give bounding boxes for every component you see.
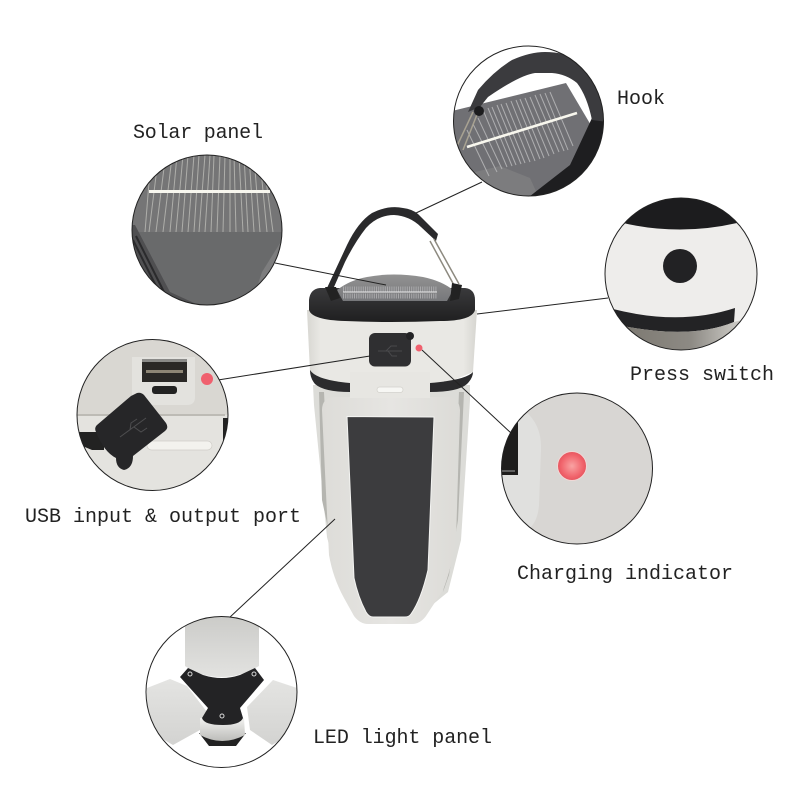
rear light panels: [313, 385, 470, 615]
fold tab pill: [147, 441, 212, 450]
lower dark band left: [310, 370, 350, 392]
lantern product: [307, 207, 477, 624]
fold tab pill: [377, 387, 403, 392]
label: Solar panel: Solar panel: [133, 122, 263, 145]
hook clip wires: [457, 112, 478, 150]
dark top cap: [309, 288, 475, 322]
right panel arm: [247, 680, 297, 745]
hook bus bar: [467, 113, 577, 147]
plate screws: [188, 672, 256, 718]
hook arm: [468, 52, 607, 122]
clip anchor: [450, 283, 462, 301]
USB cover symbol: [120, 418, 147, 437]
label: USB input & output port: USB input & output port: [25, 506, 301, 529]
base cylinder: [200, 718, 245, 741]
lantern white body: [307, 310, 477, 384]
charging LED: [416, 344, 422, 352]
callout: LED light panel: [144, 610, 300, 771]
switch top dark band: [625, 198, 737, 230]
solar grid lines: [145, 155, 273, 232]
hook solar surface: [454, 83, 590, 192]
front light panel: [322, 397, 460, 624]
handle lower end: [325, 287, 340, 301]
lower dark band right: [430, 372, 473, 392]
solar panel cells: [343, 289, 437, 296]
fold tab: [350, 372, 430, 398]
top panel column: [185, 617, 259, 677]
three-arm dark plate: [180, 668, 264, 725]
solar bus bar: [149, 190, 270, 193]
solar panel top: [337, 274, 453, 301]
hook solar grid lines: [467, 92, 573, 176]
callout: solar panel: [130, 150, 285, 312]
dark sliver: [223, 418, 228, 440]
USB cover: [369, 332, 414, 366]
base foot: [199, 733, 246, 746]
micro USB socket: [152, 386, 177, 394]
callout: press switch: [604, 198, 758, 350]
label: Press switch: Press switch: [630, 364, 774, 387]
dark band: [80, 432, 104, 450]
callout: charging indicator: [498, 390, 656, 548]
solar panel dark edge: [132, 225, 194, 304]
USB rubber cover: [95, 393, 167, 470]
hook solar lower band: [474, 166, 536, 196]
USB cover symbol: [378, 346, 402, 356]
carrying handle: [327, 207, 438, 298]
label: Hook: Hook: [617, 88, 665, 111]
USB-A socket: [142, 362, 187, 382]
red indicator light: [558, 452, 586, 480]
clip wire: [430, 239, 459, 287]
hook dark corner: [531, 118, 603, 196]
switch lower dark band: [613, 308, 735, 332]
port edge: [502, 422, 518, 475]
press switch button: [663, 249, 697, 283]
USB indicator dot: [201, 373, 213, 385]
left panel arm: [147, 679, 207, 745]
port recess: [132, 357, 195, 405]
switch lower base: [627, 320, 740, 350]
label: Charging indicator: Charging indicator: [517, 563, 733, 586]
callout: USB port: [75, 338, 231, 495]
side recess: [502, 413, 541, 527]
pointer lines: [218, 182, 608, 618]
hook rivet: [474, 106, 484, 116]
callout: hook: [450, 44, 610, 200]
label: LED light panel: LED light panel: [313, 727, 492, 750]
LED panel dark strip: [347, 416, 434, 617]
fold tab area: [75, 415, 231, 495]
